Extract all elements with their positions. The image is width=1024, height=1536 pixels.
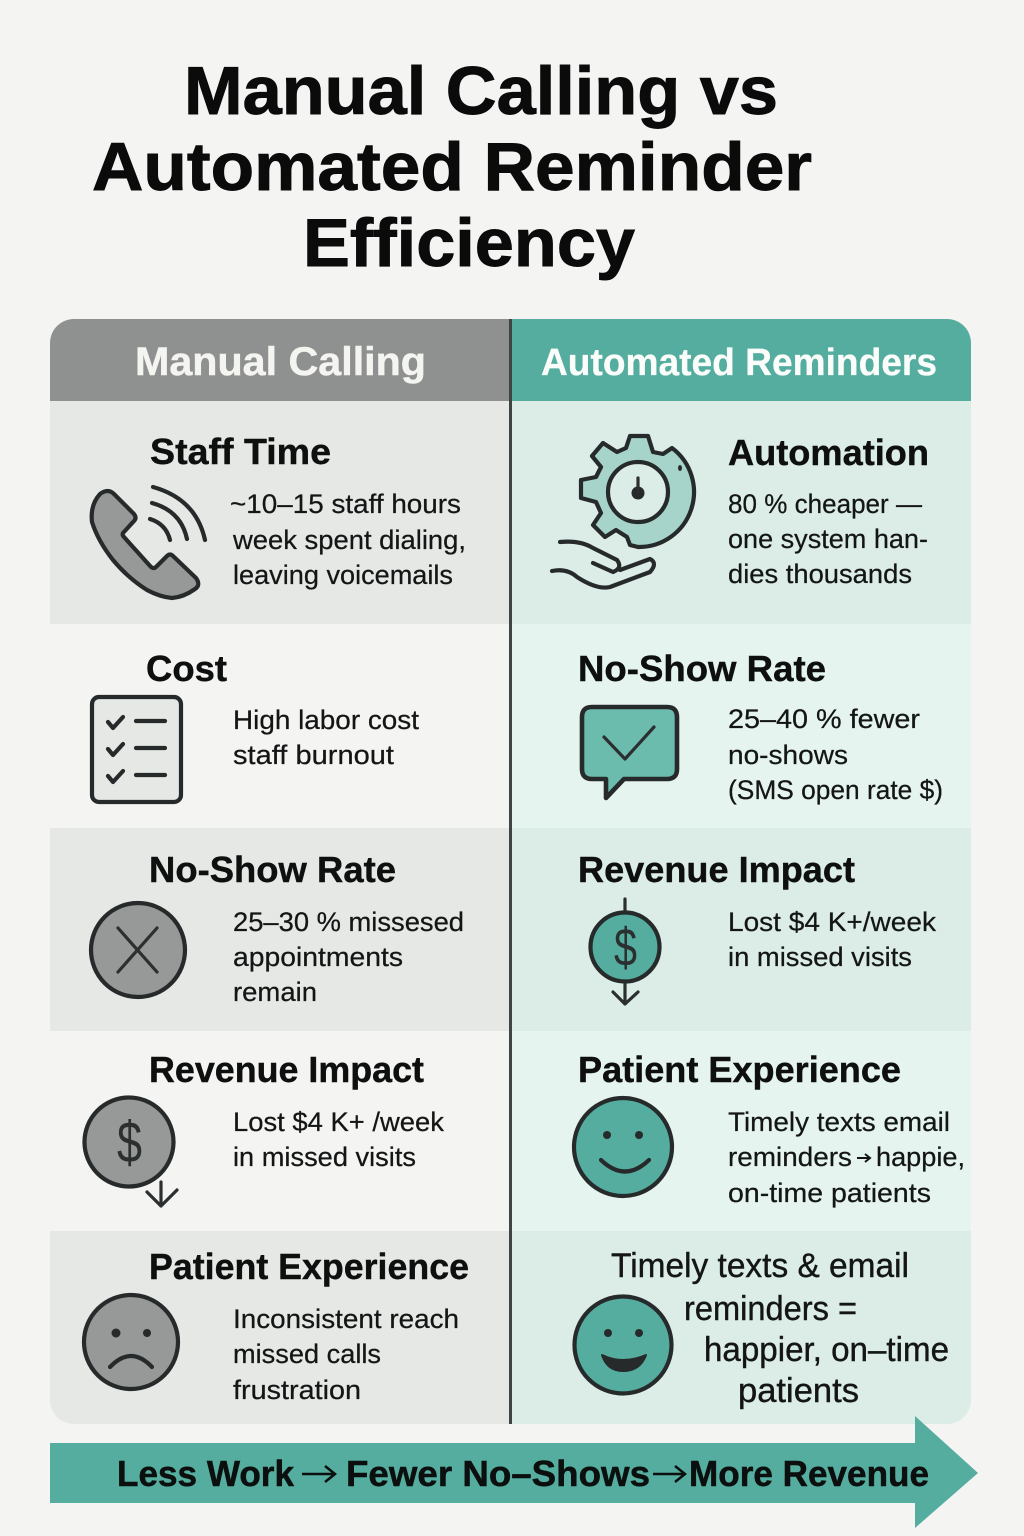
title: Efficiency <box>303 205 635 281</box>
panel: manual revenue impact: in missed visits <box>233 1142 416 1172</box>
arrow banner: More Revenue <box>689 1453 929 1494</box>
icon: chat check <box>582 707 677 798</box>
panel: manual patient experience <box>84 1246 469 1405</box>
arrow: second <box>653 1466 685 1482</box>
panel: automated patient experience: Timely texts email <box>728 1107 950 1137</box>
arrow banner <box>50 1416 978 1528</box>
panel: manual patient experience: missed calls <box>233 1339 381 1369</box>
icon: x circle <box>91 903 185 997</box>
panel: manual patient experience: Inconsistent reach <box>233 1304 459 1334</box>
title <box>92 53 812 281</box>
panel: manual cost: High labor cost <box>233 705 420 735</box>
panel: automated automation: dies thousands <box>728 559 912 589</box>
icon: checklist <box>92 697 181 802</box>
column header: automated reminders: Automated Reminders <box>541 342 937 384</box>
panel: automated closing message: reminders = <box>684 1290 857 1328</box>
panel: automated patient experience: on-time patients <box>728 1178 931 1208</box>
panel: manual no-show rate: No-Show Rate <box>149 849 396 890</box>
icon: dollar coin down: $ <box>117 1110 142 1175</box>
arrow: first <box>302 1466 335 1482</box>
arrow banner: Fewer No–Shows <box>346 1453 650 1494</box>
panel: manual staff time: ~10–15 staff hours <box>230 489 461 519</box>
panel: automated automation <box>552 432 929 589</box>
panel: manual staff time: Staff Time <box>150 431 331 472</box>
panel: manual revenue impact: Lost $4 K+ /week <box>233 1107 444 1137</box>
panel: automated closing message <box>574 1247 949 1410</box>
icon: sad face <box>84 1295 178 1389</box>
panel: automated revenue impact: Lost $4 K+/week <box>728 907 937 937</box>
panel: manual staff time: week spent dialing, <box>232 525 466 555</box>
line: reminders to happier: happie, <box>876 1142 965 1172</box>
icon: dollar coin with arrow <box>590 899 660 1004</box>
icon: phone <box>92 487 205 598</box>
panel: automated revenue impact: Revenue Impact <box>578 849 855 890</box>
panel: manual patient experience: Patient Experience <box>149 1246 469 1287</box>
panel: manual cost: Cost <box>146 648 227 689</box>
panel: automated closing message: Timely texts & email <box>611 1247 909 1285</box>
panel: automated no-show rate <box>578 648 943 805</box>
column header: manual calling: Manual Calling <box>135 340 426 384</box>
title: Manual Calling vs <box>184 53 778 129</box>
panel: automated revenue impact <box>578 849 937 1004</box>
panel: manual no-show rate: 25–30 % missesed <box>233 907 464 937</box>
panel: automated no-show rate: No-Show Rate <box>578 648 826 689</box>
panel: manual staff time: leaving voicemails <box>233 560 453 590</box>
panel: automated automation: 80 % cheaper — <box>728 489 922 519</box>
panel: manual revenue impact: Revenue Impact <box>149 1049 424 1090</box>
title: Automated Reminder <box>92 129 812 205</box>
icon: big smile <box>574 1296 672 1394</box>
icon: dollar coin with arrow: $ <box>614 918 637 978</box>
panel: manual cost: staff burnout <box>233 740 395 770</box>
panel: automated revenue impact: in missed visits <box>728 942 912 972</box>
panel: manual revenue impact <box>84 1049 444 1206</box>
panel: automated patient experience <box>574 1049 965 1208</box>
panel: manual patient experience: frustration <box>233 1375 361 1405</box>
line: reminders to happier: reminders <box>728 1142 852 1172</box>
panel: automated closing message: happier, on–time <box>704 1331 949 1369</box>
panel: manual cost <box>92 648 420 802</box>
comparison table <box>50 319 971 1424</box>
panel: manual no-show rate <box>91 849 464 1007</box>
panel: automated patient experience: Patient Experience <box>578 1049 901 1090</box>
panel: automated no-show rate: (SMS open rate $) <box>728 775 943 805</box>
icon: dollar coin down <box>84 1098 177 1206</box>
panel: automated no-show rate: 25–40 % fewer <box>728 704 920 734</box>
icon: gear in hand <box>552 436 694 588</box>
panel: automated automation: one system han- <box>728 524 928 554</box>
line: reminders to happier <box>728 1142 965 1172</box>
panel: automated no-show rate: no-shows <box>728 740 848 770</box>
panel: automated closing message: patients <box>738 1372 859 1410</box>
panel: manual no-show rate: appointments <box>233 942 403 972</box>
panel: manual no-show rate: remain <box>233 977 317 1007</box>
icon: smile face <box>574 1098 672 1196</box>
panel: automated automation: Automation <box>728 432 929 473</box>
arrow banner: Less Work <box>117 1453 295 1494</box>
panel: manual staff time <box>92 431 466 598</box>
